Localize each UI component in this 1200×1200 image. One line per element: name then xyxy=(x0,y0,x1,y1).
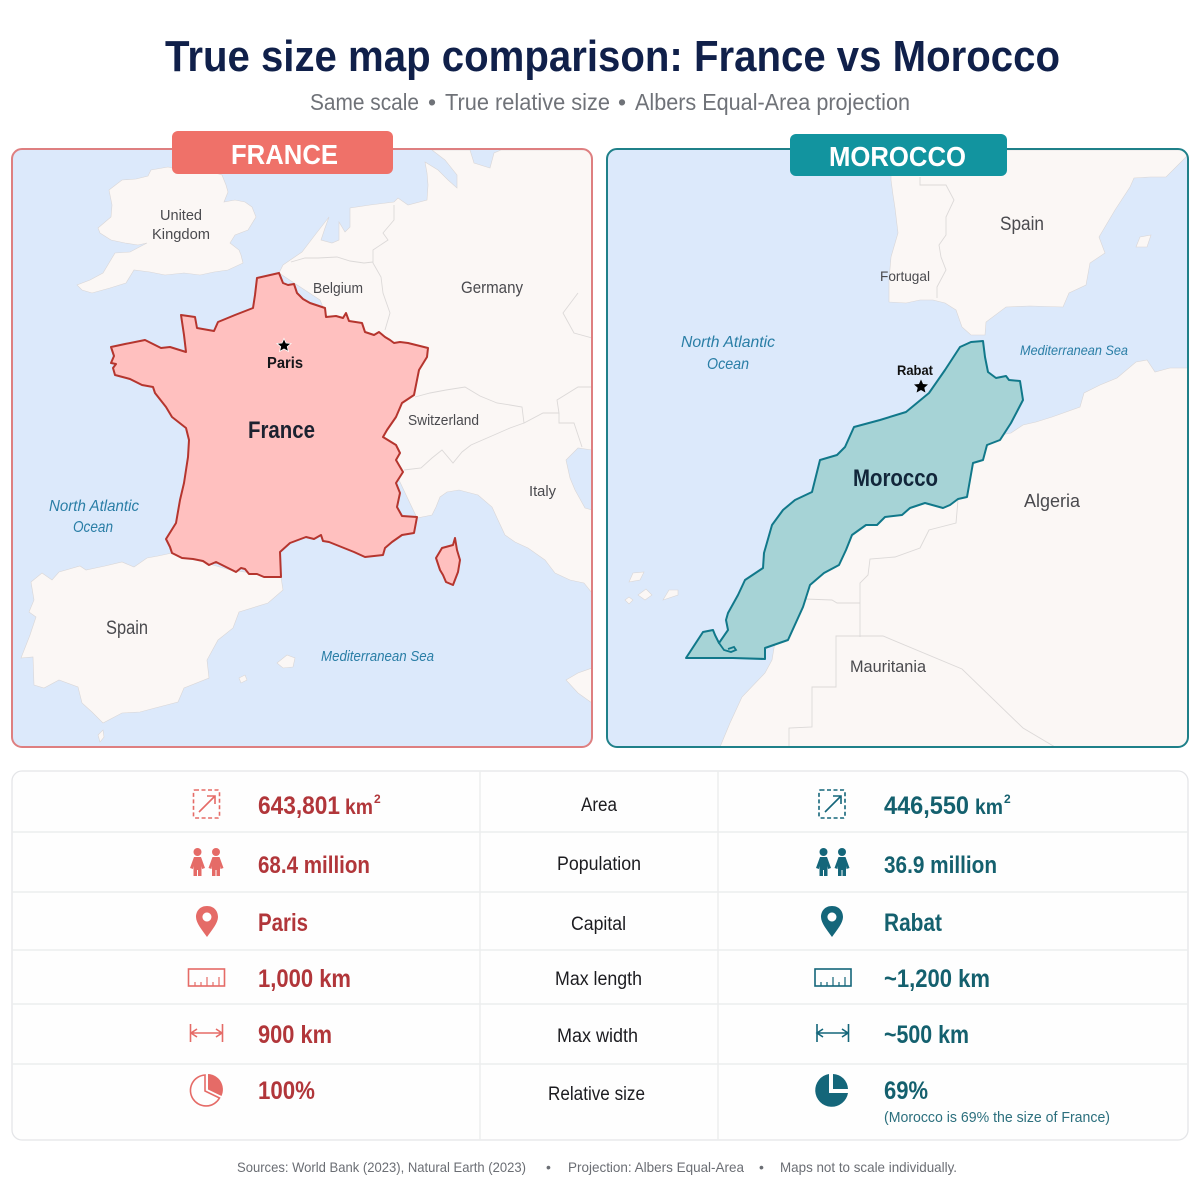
Morocco area unit: km xyxy=(975,796,1003,819)
sea labels: Mediterranean Sea xyxy=(1020,342,1128,358)
icon: Morocco population xyxy=(816,848,850,876)
label: Area: Area xyxy=(581,795,617,816)
badge: FRANCE: FRANCE xyxy=(231,139,338,170)
icon: France ruler xyxy=(188,969,224,986)
sea labels: North Atlantic xyxy=(49,498,139,515)
sea labels xyxy=(681,334,1128,373)
badge: MOROCCO: MOROCCO xyxy=(829,141,966,172)
sources footer: • xyxy=(759,1159,764,1175)
land: Canary islands xyxy=(625,572,678,604)
map labels: neighbours: Mauritania xyxy=(850,657,927,676)
map labels: neighbours xyxy=(850,214,1081,676)
subtitle: • xyxy=(428,89,436,115)
country borders xyxy=(789,500,1055,747)
map labels: neighbours: Spain xyxy=(1000,214,1044,235)
Morocco area exponent: 2 xyxy=(1004,792,1011,806)
France capital value: Paris xyxy=(258,909,308,937)
label: Relative size: Relative size xyxy=(548,1084,645,1105)
France length value: 1,000 km xyxy=(258,965,351,993)
capital marker: Rabat xyxy=(897,362,933,392)
map labels: neighbours: Algeria xyxy=(1024,491,1081,511)
badge: MOROCCO xyxy=(790,134,1007,176)
France population value: 68.4 million xyxy=(258,852,370,879)
row: Population xyxy=(190,848,997,879)
map labels: neighbours: United xyxy=(160,207,202,224)
Portugal border xyxy=(920,177,954,298)
sea: Adriatic xyxy=(566,448,592,510)
icon: Morocco capital pin xyxy=(821,906,843,937)
map labels: neighbours: Germany xyxy=(461,278,523,297)
comparison table xyxy=(12,771,1188,1140)
row: Area xyxy=(194,790,1011,820)
label: Population: Population xyxy=(557,854,641,875)
land: continental Europe north-east xyxy=(279,150,592,593)
sea labels: Ocean xyxy=(707,356,749,373)
land: Iberia xyxy=(889,150,1188,335)
row: Max length xyxy=(188,965,990,993)
country label: Morocco: Morocco xyxy=(853,465,938,492)
capital marker: Rabat: Rabat xyxy=(897,362,933,378)
France area unit: km xyxy=(345,796,373,819)
Morocco shape xyxy=(686,341,1023,659)
label: Max length: Max length xyxy=(555,969,642,990)
sea labels: North Atlantic xyxy=(681,334,775,351)
Morocco capital value: Rabat xyxy=(884,909,943,937)
icon: France width arrow xyxy=(190,1024,222,1042)
map labels: neighbours: Kingdom xyxy=(152,226,210,243)
icon: Morocco area xyxy=(819,790,845,818)
France relative value: 100% xyxy=(258,1077,315,1105)
map labels: neighbours: Italy xyxy=(529,483,556,500)
row: Capital xyxy=(196,906,943,937)
map labels: neighbours xyxy=(106,207,556,639)
subtitle: True relative size xyxy=(445,89,610,115)
land: Spain xyxy=(21,553,283,723)
Morocco population value: 36.9 million xyxy=(884,852,997,879)
subtitle: • xyxy=(618,89,626,115)
France area value: 643,801 xyxy=(258,792,340,820)
label: Max width: Max width xyxy=(557,1026,638,1047)
Morocco relative note: (Morocco is 69% the size of France) xyxy=(884,1109,1110,1126)
icon: France area xyxy=(194,790,220,818)
France area exponent: 2 xyxy=(374,792,381,806)
sources footer: Sources: World Bank (2023), Natural Earth (2023) xyxy=(237,1159,526,1175)
land: Sicily xyxy=(566,668,592,703)
icon: Morocco pie xyxy=(815,1074,848,1107)
subtitle: Same scale xyxy=(310,89,419,115)
title: True size map comparison: France vs Morocco xyxy=(165,32,1060,81)
sources footer: Maps not to scale individually. xyxy=(780,1159,957,1175)
panel: Morocco map xyxy=(607,149,1188,747)
Morocco relative value: 69% xyxy=(884,1077,928,1105)
row: Max width xyxy=(190,1021,969,1049)
land: North Africa xyxy=(720,360,1188,747)
icon: France population xyxy=(190,848,224,876)
icon: Morocco width arrow xyxy=(817,1024,848,1042)
icon: France pie xyxy=(190,1074,223,1106)
label: Capital: Capital xyxy=(571,914,626,935)
sources footer: Projection: Albers Equal-Area xyxy=(568,1159,744,1175)
France shape xyxy=(111,273,428,577)
icon: Morocco ruler xyxy=(815,969,851,986)
panel: France map xyxy=(12,149,592,747)
sources footer xyxy=(237,1159,957,1175)
sea labels xyxy=(49,498,434,665)
badge: FRANCE xyxy=(172,131,393,174)
Morocco area value: 446,550 xyxy=(884,792,969,820)
row: Relative size xyxy=(190,1074,1110,1126)
France width value: 900 km xyxy=(258,1021,332,1049)
Morocco length value: ~1,200 km xyxy=(884,965,990,993)
land: Balearic island xyxy=(1136,235,1151,247)
Dakhla inlet hook xyxy=(719,643,736,652)
capital marker: Paris: Paris xyxy=(267,355,303,372)
land: Balearic islands xyxy=(98,655,295,742)
subtitle xyxy=(310,89,910,115)
country label: France: France xyxy=(248,417,315,444)
Corsica xyxy=(436,538,460,585)
map labels: neighbours: Switzerland xyxy=(408,412,479,429)
subtitle: Albers Equal-Area projection xyxy=(635,89,910,115)
sea labels: Mediterranean Sea xyxy=(321,648,434,665)
map labels: neighbours: Fortugal xyxy=(880,268,930,284)
sources footer: • xyxy=(546,1159,551,1175)
land: United Kingdom xyxy=(77,167,256,293)
sea labels: Ocean xyxy=(73,519,113,536)
capital marker: Paris xyxy=(267,338,303,372)
country borders xyxy=(291,205,592,470)
map labels: neighbours: Spain xyxy=(106,618,148,639)
Morocco width value: ~500 km xyxy=(884,1021,969,1049)
icon: France capital pin xyxy=(196,906,218,937)
map labels: neighbours: Belgium xyxy=(313,280,363,297)
